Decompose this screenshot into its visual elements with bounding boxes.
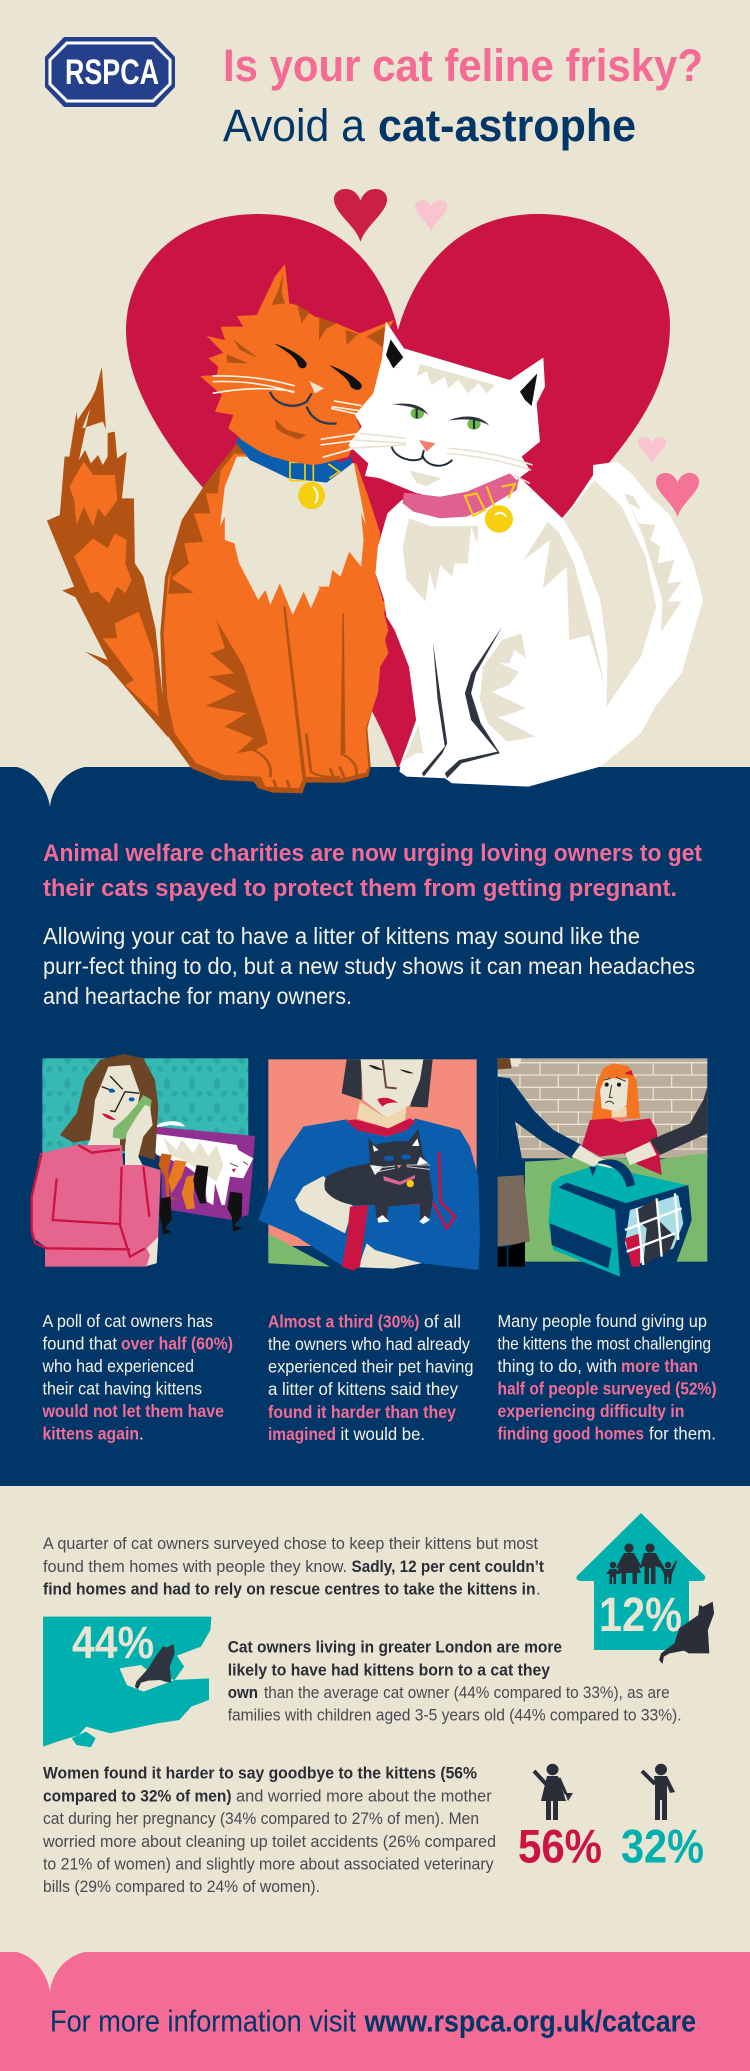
text: women and men: Women found it harder to say goodbye to the kittens (56%	[43, 1764, 477, 1783]
title: Is your cat feline frisky?	[223, 40, 703, 91]
column text: more than half: finding good homes	[498, 1424, 644, 1444]
footer text: www.rspca.org.uk/catcare	[364, 2004, 696, 2039]
icon: cat on map	[135, 1644, 175, 1689]
white cat head	[348, 322, 545, 497]
illustration: handing over carrier	[498, 1058, 707, 1277]
column text: almost a third: it would be.	[340, 1424, 425, 1444]
text: women and men: and worried more about the mother	[236, 1787, 492, 1806]
orange cat body	[160, 443, 388, 793]
neck	[357, 1102, 407, 1128]
intro paragraph	[43, 923, 695, 1009]
map: south east England 44%	[43, 1617, 211, 1747]
intro paragraph: and heartache for many owners.	[43, 983, 352, 1009]
column text: more than half: half of people surveyed (52%)	[498, 1378, 716, 1398]
column text: almost a third: of all	[424, 1312, 461, 1332]
column text: over half: kittens again	[42, 1424, 139, 1444]
grass	[525, 1153, 707, 1262]
text: London	[228, 1638, 682, 1725]
stat: 56%: 56%	[518, 1820, 602, 1873]
wallpaper	[42, 1058, 248, 1153]
text: women and men: compared to 32% of men)	[43, 1787, 232, 1806]
text: keeping kittens	[43, 1534, 544, 1598]
intro heading	[43, 840, 702, 902]
phone	[113, 1095, 152, 1139]
column text: almost a third: Almost a third (30%)	[268, 1312, 420, 1332]
illustration: woman on the phone	[32, 1054, 255, 1267]
cat	[324, 1128, 433, 1224]
text: keeping kittens: find homes and had to rely on rescue centres to take the kittens in	[43, 1580, 536, 1598]
column text: more than half: more than	[621, 1356, 698, 1376]
icon: house 12%	[576, 1513, 714, 1664]
arm	[295, 1176, 353, 1233]
footer band	[0, 1952, 750, 2071]
text: London: own	[228, 1683, 258, 1702]
column text: almost a third: a litter of kittens said they	[268, 1379, 458, 1399]
column text: almost a third: experienced their pet having	[268, 1356, 474, 1376]
orange cat head	[200, 264, 394, 465]
column text: over half: their cat having kittens	[42, 1378, 202, 1398]
text: keeping kittens: found them homes with people they know.	[43, 1557, 347, 1576]
girl	[582, 1063, 662, 1175]
right person	[650, 1087, 707, 1155]
column text: almost a third: imagined	[268, 1424, 336, 1444]
column text: over half	[42, 1311, 233, 1444]
footer notch	[10, 1951, 92, 1992]
text: London: Cat owners living in greater London are more	[228, 1638, 562, 1657]
icon: pale heart top	[415, 200, 447, 232]
column text: over half: found that	[42, 1334, 117, 1354]
icon: pink heart right	[656, 473, 699, 517]
column text: more than half: thing to do, with	[498, 1356, 617, 1376]
grass corner	[268, 1233, 330, 1267]
white cat collar	[403, 473, 520, 533]
footer text	[50, 2004, 696, 2039]
hand	[125, 1105, 153, 1167]
big crimson heart	[126, 214, 670, 770]
intro heading: their cats spayed to protect them from getting pregnant.	[43, 875, 677, 902]
text: London: than the average cat owner (44% compared to 33%), as are	[264, 1683, 670, 1702]
text: women and men: cat during her pregnancy (34% compared to 27% of men). Men	[43, 1809, 479, 1828]
text: women and men	[42, 1764, 496, 1896]
kittens	[158, 1153, 242, 1235]
icon: man figure	[642, 1764, 675, 1820]
text: keeping kittens: Sadly, 12 per cent couldn’t	[352, 1557, 544, 1576]
text: London: families with children aged 3-5 years old (44% compared to 33%).	[228, 1706, 682, 1725]
title: Avoid a	[223, 100, 366, 151]
stat: 32%: 32%	[621, 1820, 704, 1873]
face	[361, 1059, 423, 1118]
column text: more than half	[498, 1311, 716, 1444]
panel notch navy	[10, 766, 92, 807]
sweater	[258, 1118, 480, 1270]
hair	[60, 1054, 158, 1160]
orange cat tail	[47, 367, 172, 737]
text: women and men: to 21% of women) and slightly more about associated veterinary	[43, 1855, 494, 1874]
column text: over half: A poll of cat owners has	[42, 1311, 213, 1331]
column text: more than half: the kittens the most challenging	[498, 1334, 711, 1354]
title	[223, 40, 703, 151]
salmon background	[268, 1059, 477, 1246]
map: south east England 44%: 44%	[72, 1617, 154, 1668]
column text: over half: .	[139, 1424, 144, 1444]
icon: pale heart right	[638, 437, 666, 464]
column text: over half: who had experienced	[42, 1356, 194, 1376]
sofa	[155, 1127, 255, 1220]
jumper	[32, 1145, 161, 1267]
intro heading: Animal welfare charities are now urging loving owners to get	[43, 840, 702, 867]
footer text: For more information visit	[50, 2004, 356, 2039]
column text: more than half: experiencing difficulty in	[498, 1401, 684, 1421]
red ribbon trim	[388, 1152, 455, 1228]
title: cat-astrophe	[378, 100, 636, 151]
carrier	[548, 1159, 692, 1277]
icon: crimson heart	[334, 189, 387, 242]
illustration: woman holding cat	[258, 1059, 480, 1271]
navy panel	[0, 767, 750, 1486]
brick wall	[498, 1058, 707, 1158]
text: women and men: bills (29% compared to 24% of women).	[43, 1877, 320, 1896]
icon: woman figure	[534, 1764, 573, 1820]
text: keeping kittens: .	[536, 1580, 541, 1598]
intro paragraph: purr-fect thing to do, but a new study shows it can mean headaches	[43, 953, 695, 979]
column text: over half: over half (60%)	[121, 1334, 233, 1354]
orange cat collar	[236, 435, 352, 509]
icon: cat silhouette	[659, 1602, 714, 1664]
mother cat	[152, 1133, 253, 1205]
column text: almost a third	[268, 1312, 474, 1444]
island	[72, 1732, 96, 1747]
text: London: likely to have had kittens born to a cat they	[228, 1660, 550, 1679]
column text: almost a third: found it harder than they	[268, 1402, 456, 1422]
family icon	[606, 1543, 677, 1584]
column text: more than half: for them.	[649, 1424, 716, 1444]
text: women and men: worried more about cleaning up toilet accidents (26% compared	[42, 1832, 496, 1851]
column text: almost a third: the owners who had already	[268, 1334, 470, 1354]
intro paragraph: Allowing your cat to have a litter of kittens may sound like the	[43, 923, 640, 949]
hair	[342, 1059, 362, 1100]
text: keeping kittens: A quarter of cat owners surveyed chose to keep their kittens but most	[43, 1534, 538, 1553]
logo: RSPCA	[45, 37, 175, 107]
orange cat	[47, 264, 394, 793]
left person	[498, 1058, 582, 1267]
estuary	[120, 1665, 175, 1692]
column text: more than half: Many people found giving up	[498, 1311, 707, 1331]
column text: over half: would not let them have	[42, 1401, 224, 1421]
face	[87, 1065, 140, 1147]
hands	[572, 1145, 613, 1172]
white cat body	[375, 462, 703, 787]
logo: RSPCA: RSPCA	[65, 53, 159, 92]
white cat	[348, 322, 703, 787]
icon: house 12%: 12%	[599, 1589, 682, 1642]
